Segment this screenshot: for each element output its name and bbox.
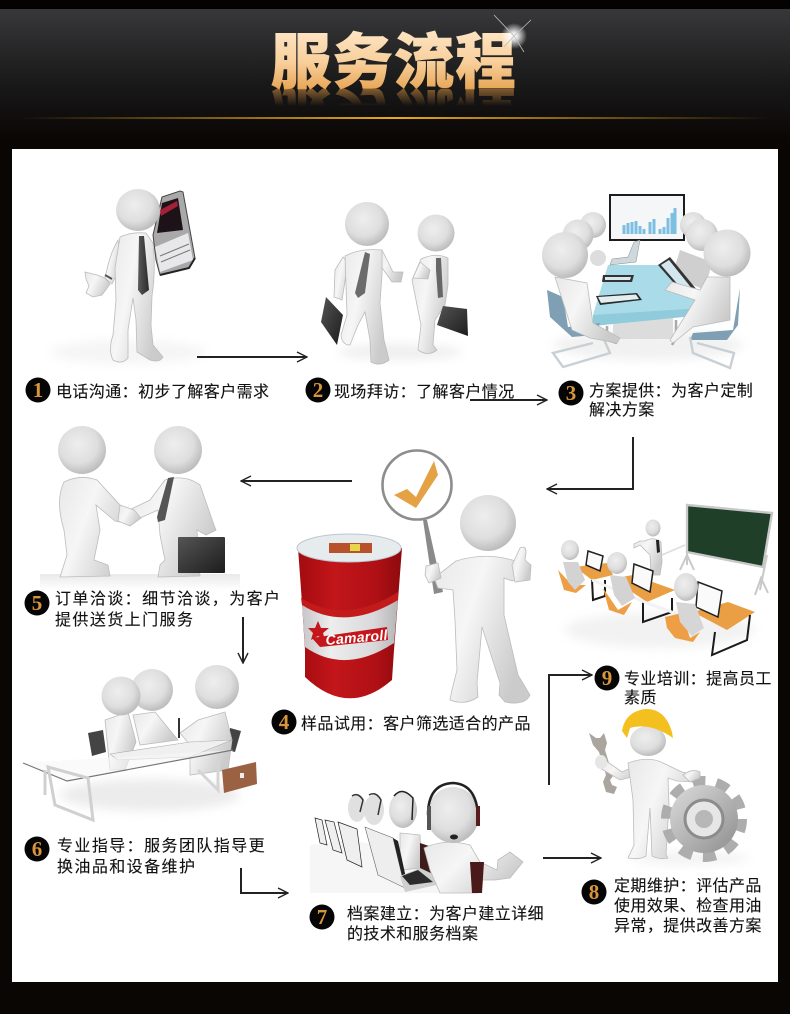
hard hat: [622, 709, 673, 738]
body: [628, 759, 700, 859]
label 4: [272, 710, 531, 734]
briefcase: [178, 537, 225, 573]
title: 服务流程: 服务流程: [271, 29, 517, 96]
tablets: [602, 275, 634, 282]
chairs: [558, 570, 700, 642]
glass table: [23, 750, 233, 781]
sparkle: [494, 15, 531, 52]
label 9: 素质: [624, 689, 657, 707]
briefcase: [222, 762, 257, 793]
drum: [297, 534, 402, 698]
label 9: 9: [602, 666, 612, 690]
white panel: [12, 149, 778, 982]
figure: [425, 495, 531, 703]
step 8 illustration: worker with wrench and gear: [589, 709, 750, 864]
label 2: 现场拜访：了解客户情况: [334, 383, 515, 401]
arrow 2 to 3: [470, 399, 547, 401]
briefcase: [437, 306, 468, 336]
label 1: 电话沟通：初步了解客户需求: [56, 383, 269, 401]
label 7: 7: [317, 905, 327, 929]
label 8: 定期维护：评估产品: [614, 877, 762, 895]
drum logo: Camaroll: [325, 627, 389, 648]
label 8: [582, 877, 762, 935]
header band: [0, 9, 790, 120]
label 3: 解决方案: [589, 401, 655, 419]
arrow 6 to 7: [241, 868, 288, 893]
table: [593, 265, 703, 326]
laptops: [586, 551, 722, 617]
wrench: [589, 733, 617, 794]
step 9 illustration: training room: [558, 505, 772, 655]
gold divider: [20, 117, 770, 119]
teacher: [634, 520, 685, 575]
label 7: [310, 904, 544, 943]
step 7 illustration: call centre: [310, 783, 523, 893]
label 8: 8: [589, 880, 599, 904]
label 6: 换油品和设备维护: [57, 858, 196, 876]
agent with headset: [424, 783, 523, 893]
tie: [138, 236, 149, 295]
label 8: 使用效果、检查用油: [614, 897, 762, 915]
drum logo: [308, 621, 389, 648]
step 1 illustration: man on phone: [50, 189, 206, 364]
label 7: 的技术和服务档案: [347, 925, 478, 943]
label 5: 订单洽谈：细节洽谈，为客户: [55, 590, 281, 608]
title reflection: 服务流程: [271, 80, 517, 147]
label 5: 5: [32, 591, 42, 615]
label 5: 提供送货上门服务: [55, 611, 194, 629]
label 6: 专业指导：服务团队指导更: [57, 837, 266, 855]
chairs: [547, 290, 600, 337]
desks: [575, 563, 755, 630]
label 2: [306, 378, 515, 402]
label 4: 样品试用：客户筛选适合的产品: [301, 714, 531, 733]
students: [561, 540, 579, 560]
arrow 1 to 2: [197, 356, 307, 358]
phone: [153, 191, 195, 275]
arrow 7 to 8: [543, 857, 601, 859]
label 3: 3: [566, 381, 576, 405]
step 2 illustration: two men running with briefcases: [321, 202, 468, 364]
magnifier with check mark: [382, 450, 452, 594]
blackboard: [680, 505, 772, 595]
label 8: 异常，提供改善方案: [614, 917, 762, 935]
gear: [666, 781, 742, 857]
arrow 8 to 9: [549, 675, 592, 785]
step 6 illustration: glass table team: [23, 665, 257, 820]
label 4: 4: [279, 710, 290, 734]
label 7: 档案建立：为客户建立详细: [347, 905, 544, 923]
briefcase: [321, 297, 343, 345]
arrow 3 to 4: [547, 437, 633, 489]
label 3: 方案提供：为客户定制: [589, 382, 753, 400]
tie: [436, 258, 443, 298]
monitor with chart: [610, 195, 684, 240]
label 3: [558, 380, 753, 419]
tie: [157, 477, 174, 522]
laptops: [315, 818, 362, 867]
label 9: [594, 666, 772, 707]
label 6: 6: [32, 837, 42, 861]
seated figures: [555, 277, 620, 343]
label 2: 2: [313, 378, 323, 402]
step 4 illustration: oil drum and figure with magnifier: [297, 450, 531, 703]
step 5 illustration: handshake with briefcase: [40, 426, 240, 590]
tie: [355, 252, 370, 298]
label 1: 1: [33, 378, 43, 402]
label 9: 专业培训：提高员工: [624, 670, 772, 688]
label 5: [24, 590, 281, 629]
arrow 4 to 5: [241, 480, 352, 482]
label 6: [24, 836, 266, 876]
arrow 5 to 6: [242, 617, 244, 663]
label 1: [26, 378, 269, 402]
step 3 illustration: meeting table: [542, 195, 750, 368]
